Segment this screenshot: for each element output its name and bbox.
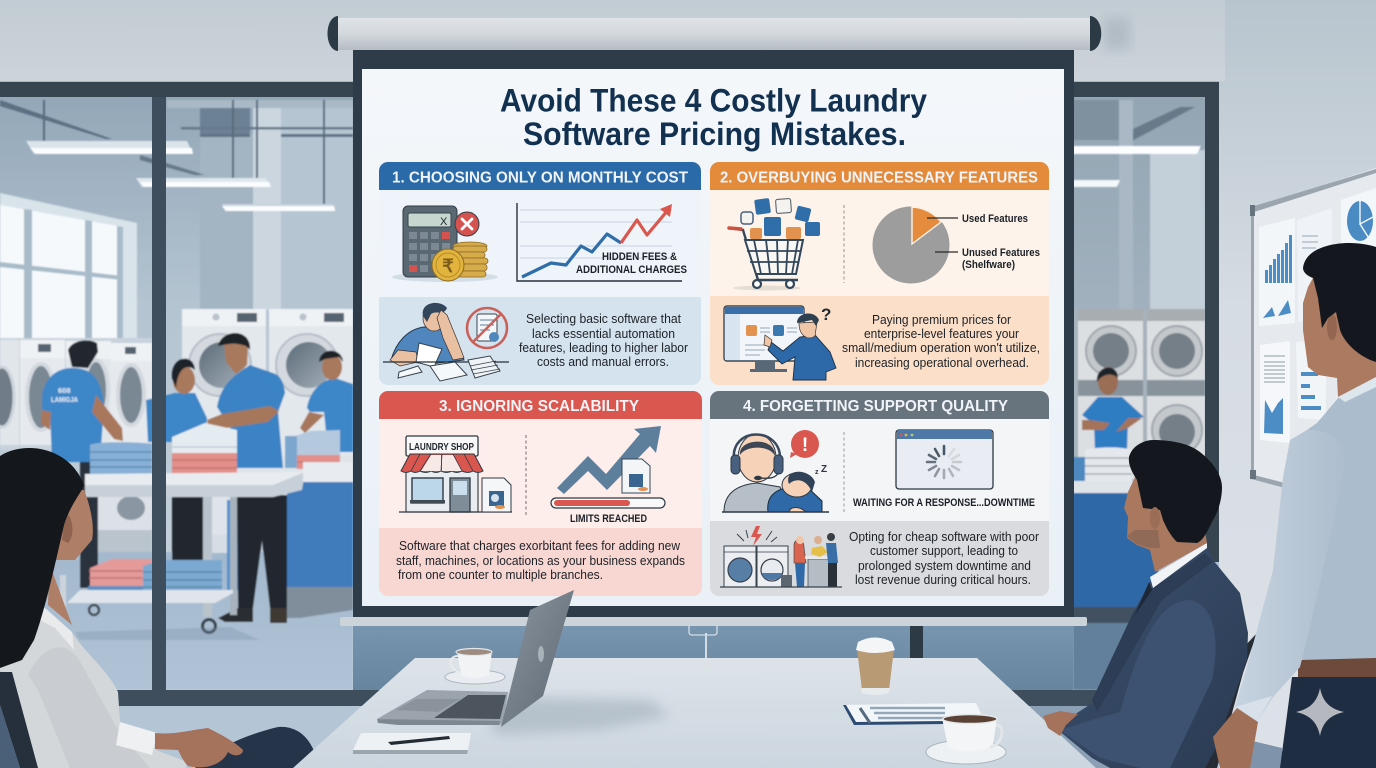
shirt body: [1300, 377, 1376, 660]
blue cabinet: [227, 478, 353, 618]
icon: shopping cart of features: [729, 198, 820, 290]
projector stand: [689, 626, 923, 660]
text block 3: Software that charges exorbitant fees for adding new: [399, 538, 681, 553]
icon: loading window: [853, 430, 1035, 509]
chair: [0, 672, 38, 768]
shirt sleeve: [1235, 430, 1345, 722]
icon: calculator and coins: ₹: [442, 256, 454, 276]
laundry room behind glass, left: [0, 97, 353, 690]
icon: laundry shop: [399, 436, 512, 512]
panel 1: monthly cost: [379, 162, 701, 385]
hand: [1213, 708, 1258, 768]
screen roller housing: [328, 16, 1101, 51]
hands: [155, 728, 243, 767]
chair back: [1200, 633, 1257, 768]
heading 2: 2. OVERBUYING UNNECESSARY FEATURES: [720, 170, 1038, 186]
mug and saucer left: [445, 648, 505, 684]
icon: growth arrow hitting limits: LIMITS REACHED: [570, 513, 647, 525]
paper coffee cup: [856, 638, 895, 695]
panel 3: scalability: [379, 391, 702, 596]
belt: [1298, 658, 1376, 677]
pie chart: Unused Features: [962, 247, 1040, 259]
text block 3: [396, 538, 685, 582]
text block 2: enterprise-level features your: [864, 326, 1020, 341]
notepad and pen: [353, 733, 471, 754]
washers far: [0, 309, 353, 459]
laundry room behind glass, right: [1073, 97, 1205, 690]
shirt collar: [1338, 377, 1376, 402]
icon: broken washers and customers: [720, 526, 842, 587]
icon: support agent asleep: Z: [821, 464, 827, 475]
text block 4: lost revenue during critical hours.: [855, 572, 1031, 587]
clipboard: [843, 703, 985, 725]
chart: rising costs: ADDITIONAL CHARGES: [576, 264, 687, 276]
pie chart: (Shelfware): [962, 259, 1015, 271]
hair: [0, 448, 84, 668]
text block 4: [849, 529, 1040, 587]
face: [1124, 470, 1207, 572]
text block 1: [519, 311, 689, 369]
neck and face: [1303, 278, 1376, 397]
hand: [1043, 711, 1078, 736]
worker right: [300, 351, 353, 452]
text block 2: small/medium operation won't utilize,: [842, 340, 1040, 355]
text block 4: customer support, leading to: [870, 543, 1018, 558]
text block 1: lacks essential automation: [532, 326, 675, 341]
blouse: [0, 600, 187, 768]
icon: man at monitor: ?: [821, 305, 831, 324]
text block 1: costs and manual errors.: [537, 354, 669, 369]
hair: [1129, 440, 1222, 543]
projection screen: [328, 16, 1101, 626]
icon: growth arrow hitting limits: [551, 426, 665, 525]
icon: loading window: WAITING FOR A RESPONSE...DOWNTIME: [853, 497, 1035, 509]
worker back view: LAMIGJA: [51, 395, 78, 404]
worker back view: 608: [58, 386, 71, 395]
icon: calculator and coins: X: [440, 216, 448, 228]
suit: [1058, 545, 1248, 768]
chart: rising costs: HIDDEN FEES &: [602, 251, 677, 263]
panel 2: overbuying: [710, 162, 1049, 385]
heading 4: 4. FORGETTING SUPPORT QUALITY: [743, 398, 1008, 415]
woman attendee: [0, 448, 316, 768]
icon: calculator and coins: [392, 206, 498, 282]
worker in far room: [1082, 367, 1144, 450]
neck and face: [48, 490, 93, 625]
title: [500, 82, 927, 152]
glass wall frame: [0, 82, 1219, 690]
text block 3: from one counter to multiple branches.: [398, 567, 603, 582]
heading 3: 3. IGNORING SCALABILITY: [439, 398, 639, 415]
whiteboard with charts: [1250, 168, 1376, 488]
icon: laundry shop: LAUNDRY SHOP: [409, 442, 474, 453]
icon: man at monitor: [724, 305, 836, 380]
worker woman: [146, 359, 207, 560]
text block 2: increasing operational overhead.: [855, 355, 1029, 370]
pie chart: Used Features: [962, 213, 1028, 225]
collar and tie: [1150, 543, 1207, 588]
meeting table: [293, 590, 1096, 768]
standing man attendee: [1213, 243, 1376, 768]
icon: support agent asleep: !: [802, 435, 808, 456]
panel 4: support: [710, 391, 1049, 596]
watermark star: [1296, 688, 1344, 736]
chart: rising costs: [517, 203, 687, 281]
hair: [1303, 243, 1376, 362]
text block 4: prolonged system downtime and: [858, 558, 1031, 573]
mug and saucer right: [926, 714, 1006, 764]
pie chart: [872, 206, 1040, 284]
text block 2: [842, 312, 1040, 370]
text block 1: Selecting basic software that: [526, 311, 681, 326]
screen bottom bar: [340, 617, 1087, 626]
text block 1: features, leading to higher labor: [519, 340, 689, 355]
trousers: [1280, 677, 1376, 768]
prohibited document: [467, 308, 507, 348]
text block 3: staff, machines, or locations as your business expands: [396, 553, 685, 568]
text block 2: Paying premium prices for: [872, 312, 1012, 327]
folded laundry stacks: [90, 423, 340, 475]
laptop: [377, 590, 574, 727]
floor behind table: [0, 626, 1282, 768]
icon: stressed worker: [383, 303, 509, 381]
laundry cart: [60, 559, 233, 632]
text block 4: Opting for cheap software with poor: [849, 529, 1040, 544]
heading 1: 1. CHOOSING ONLY ON MONTHLY COST: [392, 170, 688, 186]
icon: support agent asleep: z: [815, 469, 819, 476]
seated man attendee: [1043, 440, 1257, 768]
worker back view: [41, 340, 123, 588]
icon: support agent asleep: [722, 430, 829, 512]
worker centre: [207, 333, 287, 623]
title: Avoid These 4 Costly Laundry: [500, 82, 927, 118]
folding table: [85, 462, 353, 617]
title: Software Pricing Mistakes.: [523, 116, 906, 152]
